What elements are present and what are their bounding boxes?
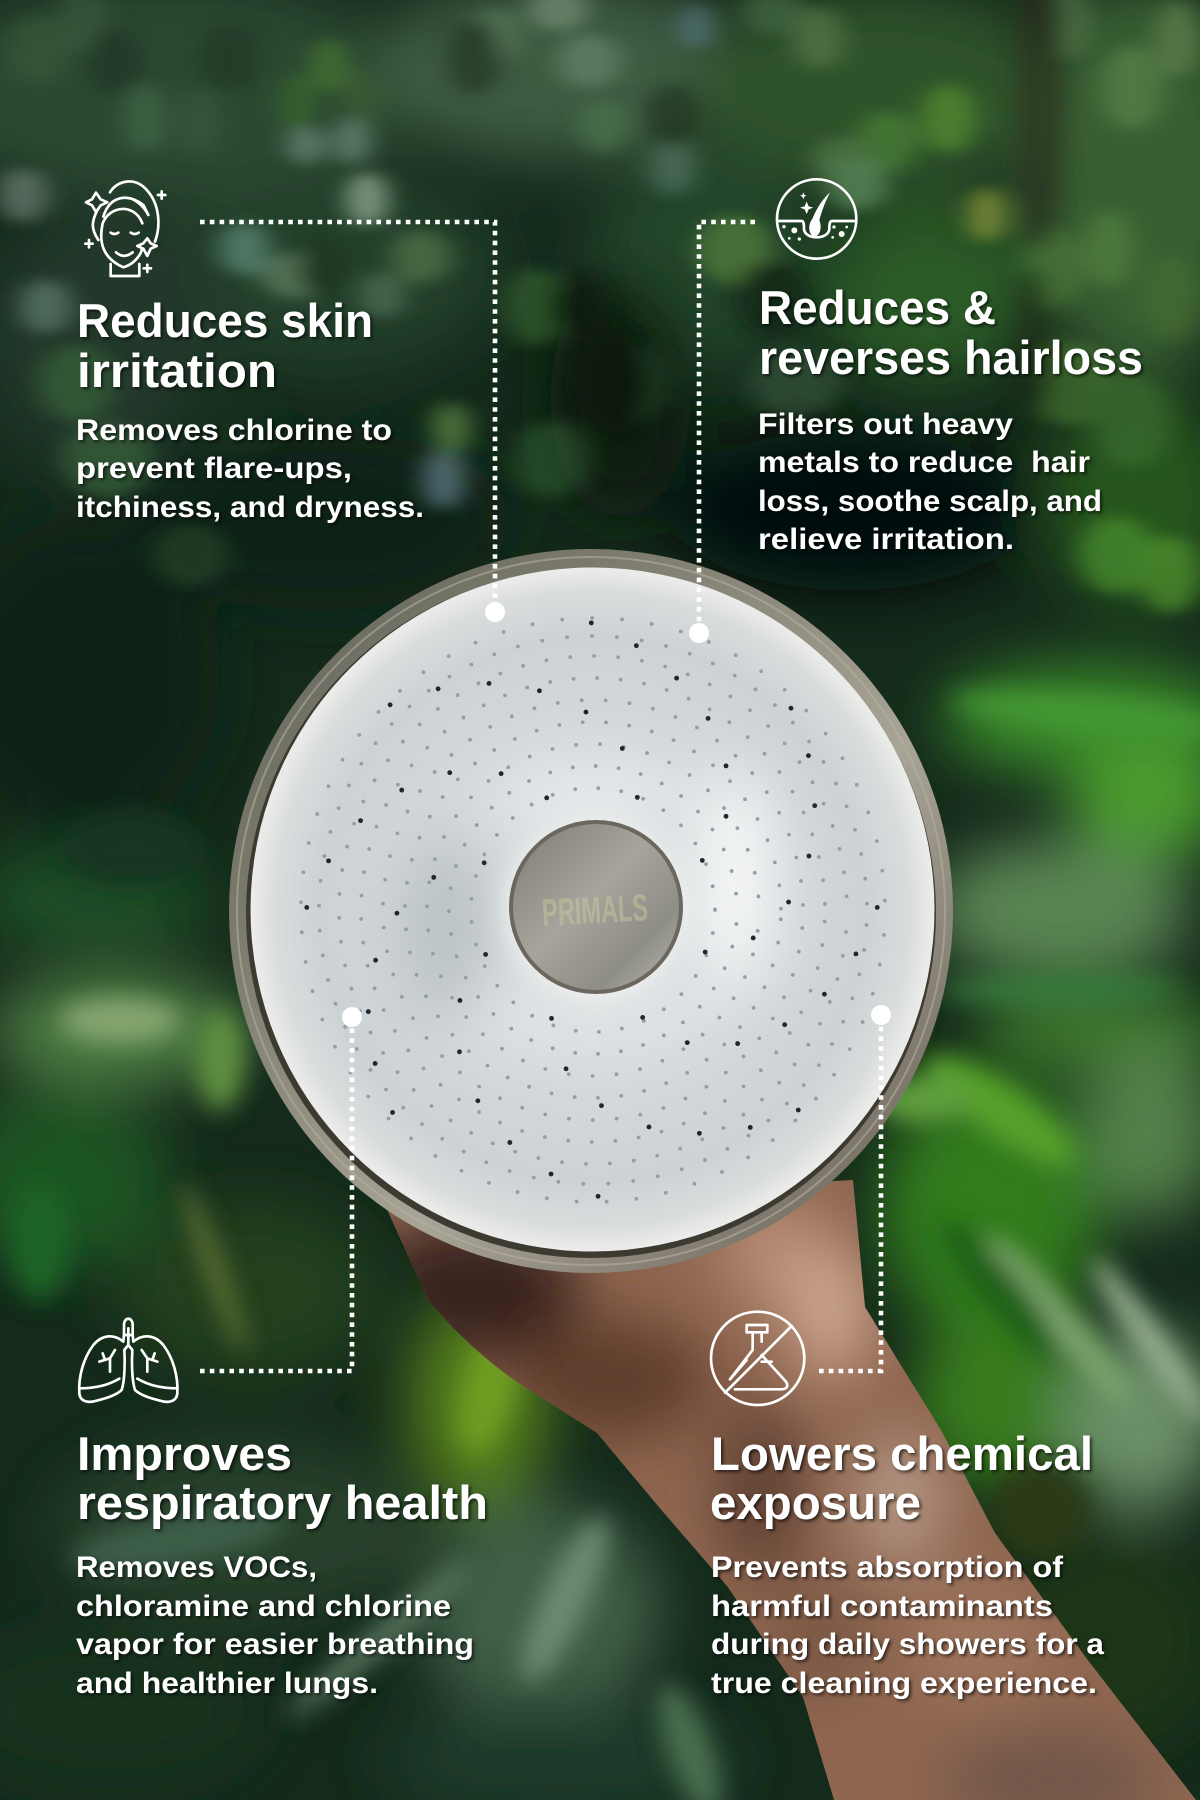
body text: during daily showers for a [711,1628,1104,1661]
heading: irritation [77,344,277,397]
body text: metals to reduce hair [758,446,1090,479]
dappled bokeh in the upper canopy [0,0,1200,613]
heading [710,1427,1093,1529]
body text [758,408,1102,556]
body text: Removes VOCs, [76,1551,317,1584]
heading [759,281,1143,384]
body text: Filters out heavy [758,408,1013,441]
panel: reduces and reverses hair loss [758,179,1143,556]
heading: Reduces & [759,281,996,334]
panel: lowers chemical exposure [710,1312,1104,1700]
white silicone face [250,568,934,1252]
icon: hair follicle in circle [777,179,856,259]
body text: loss, soothe scalp, and [758,485,1102,518]
connector: respiratory health [200,1007,362,1371]
heading: Improves [77,1427,292,1480]
body text: Prevents absorption of [711,1551,1064,1584]
hand and forearm holding the shower head [360,1170,1200,1800]
body text [711,1551,1104,1700]
heading [77,1427,488,1529]
heading: respiratory health [77,1476,488,1529]
heading: Lowers chemical [711,1427,1093,1480]
body text [76,1551,474,1700]
centre metal button [504,817,688,1001]
panel: reduces skin irritation [76,181,424,524]
body text: harmful contaminants [711,1590,1053,1623]
engraved brand name: PRIMALS [541,887,649,935]
panel: improves respiratory health [76,1319,488,1700]
body text: prevent flare-ups, [76,452,352,485]
heading: Reduces skin [77,294,373,347]
body text: Removes chlorine to [76,414,392,447]
icon: crossed-out flask [711,1312,804,1405]
icon: lungs [79,1319,177,1402]
metal rim [229,549,953,1273]
heading: exposure [710,1476,921,1529]
body text: relieve irritation. [758,523,1014,556]
body text: itchiness, and dryness. [76,491,424,524]
body text: chloramine and chlorine [76,1590,451,1623]
connector: skin irritation [200,222,505,622]
soft foliage shapes in the lower half [10,684,1200,1800]
heading: reverses hairloss [759,331,1143,384]
connector: chemical exposure [819,1005,891,1371]
icon: face with towel and sparkles [85,181,165,276]
heading [77,294,373,397]
body text [76,414,424,524]
body text: and healthier lungs. [76,1667,378,1700]
spray holes [301,618,885,1202]
body text: vapor for easier breathing [76,1628,474,1661]
connector: hair loss [689,222,755,643]
shower head [229,549,953,1273]
body text: true cleaning experience. [711,1667,1097,1700]
